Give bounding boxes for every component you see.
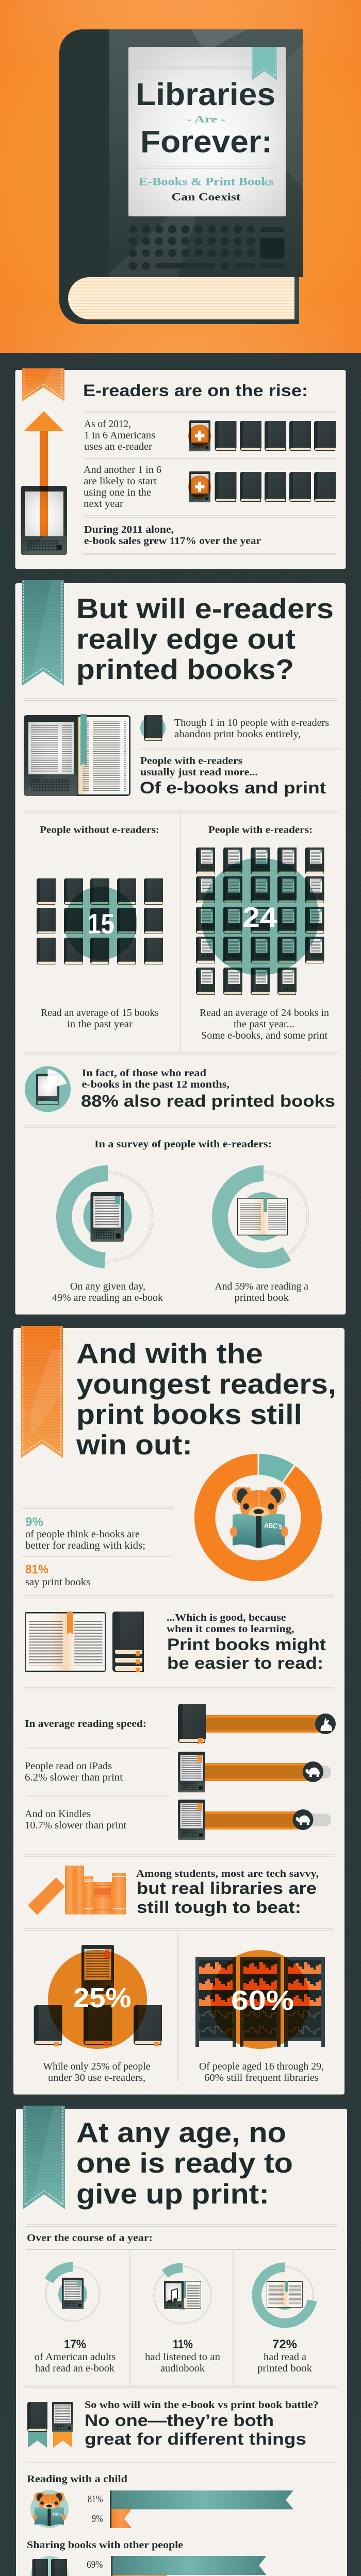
text: another 1 in 6: are likely to start: [84, 476, 157, 487]
stat: 81 percent: say print books: [25, 1577, 90, 1588]
title: Libraries: Libraries: [136, 77, 275, 112]
caption: 24 books: Some e-books, and some print: [201, 1030, 327, 1041]
text: Kindles slower: 10.7% slower than print: [25, 1820, 126, 1831]
subheading: no one: great for different things: [85, 2430, 306, 2448]
text: another 1 in 6: using one in the: [84, 487, 151, 498]
stat: 17 percent: had read an e-book: [35, 2363, 114, 2374]
text: 1 in 6 use e-reader: As of 2012,: [84, 418, 131, 430]
text: another 1 in 6: And another 1 in 6: [84, 464, 161, 476]
pictogram: 24 books: 24: [242, 901, 277, 933]
screen: [128, 47, 286, 216]
text: 1 in 10 abandon print: abandon print books entirely,: [174, 728, 301, 740]
callout: e-book sales growth: During 2011 alone,: [84, 524, 174, 535]
pictogram: 60 percent library shelves: 60%: [231, 1985, 294, 2016]
row: reading with a child: 81%: [88, 2494, 103, 2505]
heading: [76, 592, 334, 685]
text: students tech savvy: Among students, most are tech savvy,: [136, 1868, 319, 1879]
row: sharing books: 69%: [87, 2559, 103, 2570]
label: over a year: Over the course of a year:: [27, 2232, 153, 2244]
stat: 81 percent: 81%: [25, 1563, 48, 1577]
stat: 72 percent: printed book: [257, 2363, 312, 2374]
teal bookmark: [23, 2106, 65, 2209]
subheading: of e-books and print: Of e-books and print: [140, 778, 326, 797]
caption: 25 percent: While only 25% of people: [43, 2061, 151, 2072]
icon: book and e-reader with ribbons: [27, 2402, 73, 2448]
e-reader with rising arrow: [21, 411, 67, 555]
heading: E-readers are on the rise:: [83, 381, 308, 400]
pictogram: 24 books: [196, 848, 324, 995]
stat: 9 percent: of people think e-books are: [25, 1529, 140, 1540]
text: 1 in 6 use e-reader: uses an e-reader: [84, 441, 152, 452]
callout: e-book sales growth: [84, 524, 261, 547]
caption: 24 books: [200, 1007, 329, 1041]
caption: 49 percent: On any given day,: [70, 1281, 145, 1292]
caption: 15 books: [41, 1007, 159, 1030]
text: of e-book readers: e-books in the past 12 months,: [81, 1079, 229, 1090]
text: usually just read more: usually just read more...: [140, 767, 258, 778]
heading: one is ready to: [76, 2147, 293, 2179]
panel: youngest readers: [13, 1326, 344, 2095]
subheading: print easier to read: Print books might: [167, 1635, 326, 1654]
pictogram: 25 percent e-reader use: [34, 1945, 162, 2049]
text: Kindles slower: [25, 1808, 126, 1831]
subheading: print easier to read: [167, 1635, 326, 1672]
icon row: one e-reader and five books: [188, 420, 336, 451]
caption: 59 percent: And 59% are reading a: [215, 1281, 308, 1292]
row: reading with a child: Reading with a child: [27, 2473, 127, 2485]
caption: 49 percent: [52, 1281, 163, 1303]
orange bookmark: [21, 1326, 63, 1458]
heading: print books still: [76, 1398, 302, 1430]
survey heading: In a survey of people with e-readers:: [94, 1139, 272, 1150]
donut: 72 percent print: [252, 2263, 317, 2328]
pictogram: 15 books: 15: [87, 908, 114, 940]
text: 1 in 6 use e-reader: 1 in 6 Americans: [84, 430, 155, 441]
heading: win out:: [76, 1429, 192, 1461]
text: Kindles slower: And on Kindles: [25, 1808, 91, 1820]
caption: 60 percent: Of people aged 16 through 29,: [199, 2061, 324, 2072]
label: average reading speed: In average reading speed:: [25, 1718, 146, 1730]
subtitle: can coexist: Can Coexist: [172, 191, 241, 203]
caption: 15 books: Read an average of 15 books: [41, 1007, 159, 1019]
caption: 24 books: Read an average of 24 books in: [200, 1007, 329, 1019]
speed bar: iPad with turtle: [178, 1752, 331, 1792]
text: iPads slower: People read on iPads: [25, 1760, 112, 1772]
text: 1 in 10 abandon print: [174, 717, 329, 740]
caption: 25 percent: under 30 use e-readers,: [48, 2072, 145, 2083]
pictogram: 60 percent library shelves: [195, 1950, 325, 2049]
icon: book on teal circle: [140, 715, 166, 741]
heading: printed books?: [76, 653, 294, 685]
subtitle: e-books and print books: E-Books & Print Books: [139, 175, 274, 188]
subheading: real libraries: still tough to beat:: [137, 1898, 301, 1917]
pie icon: 88 percent: [25, 1066, 71, 1112]
icon: orange book pile: [28, 1866, 126, 1915]
title: Are: - Are -: [187, 114, 226, 125]
icon: teddy bear reading: ABC's: [264, 1521, 283, 1530]
illustration: e-reader shaped as a book: [59, 29, 303, 324]
stat: 11 percent: [145, 2337, 220, 2374]
text: 1 in 6 use e-reader: [84, 418, 155, 452]
bars: 81 and 9 percent: [110, 2490, 293, 2528]
text: iPads slower: 6.2% slower than print: [25, 1772, 123, 1783]
icon: teddy bear reading: [230, 1485, 288, 1548]
subheading: real libraries: [137, 1879, 317, 1917]
icon: open book: [25, 1612, 106, 1672]
text: good for learning: [167, 1612, 294, 1635]
stat: 17 percent: of American adults: [34, 2351, 116, 2363]
column heading: without e-readers: People without e-readers:: [40, 824, 159, 836]
icon: two stacked books: [30, 2556, 69, 2576]
donut: book preference with kids: [194, 1454, 322, 1581]
stat: 72 percent: had read a: [264, 2351, 306, 2363]
icon: bear: [30, 2490, 69, 2528]
speed bar: Kindle with turtle: [178, 1800, 331, 1840]
stat: 17 percent: [34, 2337, 116, 2374]
text: good for learning: ...Which is good, because: [167, 1612, 286, 1623]
orange bookmark: [22, 368, 64, 401]
subheading: no one: No one—they’re both: [85, 2411, 274, 2430]
row: reading with a child: 9%: [92, 2513, 103, 2524]
caption: 24 books: the past year...: [234, 1019, 294, 1030]
stat: 11 percent: audiobook: [160, 2363, 205, 2374]
donut: 11 percent audiobook: [154, 2263, 211, 2324]
heading: [76, 1337, 336, 1461]
panel: e-readers are on the rise: [15, 368, 346, 569]
caption: 59 percent: [215, 1281, 308, 1303]
callout: e-book sales growth: e-book sales grew 117% over the year: [84, 535, 261, 547]
row: sharing books: Sharing books with other people: [27, 2539, 183, 2551]
heading: But will e-readers: [76, 592, 334, 624]
text: of e-book readers: In fact, of those who read: [81, 1067, 206, 1079]
stat: 17 percent: 17%: [64, 2337, 86, 2351]
heading: really edge out: [76, 623, 296, 655]
pictogram: 15 books: [37, 878, 163, 964]
speed bar: print book with rabbit: [178, 1704, 336, 1744]
teal bookmark: [252, 47, 277, 80]
panel: will e-readers edge out printed books: [15, 580, 346, 1315]
heading: At any age, no: [76, 2116, 286, 2148]
subheading: print easier to read: be easier to read:: [167, 1654, 323, 1672]
column heading: with e-readers: People with e-readers:: [208, 824, 313, 836]
text: usually just read more: [140, 755, 258, 778]
stat: 9 percent: 9%: [25, 1515, 43, 1529]
heading: And with the: [76, 1337, 263, 1369]
caption: 59 percent: printed book: [234, 1292, 289, 1303]
stat: 11 percent: 11%: [173, 2337, 193, 2351]
icon: stack of pages book: [112, 1612, 144, 1672]
pictogram: 25 percent e-reader use: 25%: [73, 1982, 131, 2013]
text: good for learning: when it comes to learning,: [167, 1623, 294, 1635]
caption: 25 percent: [43, 2061, 151, 2083]
teal bookmark: [22, 580, 64, 686]
stat: 72 percent: [257, 2337, 312, 2374]
subheading: no one: [85, 2411, 306, 2448]
stat: 9 percent: better for reading with kids;: [25, 1540, 145, 1551]
panel: no one gives up print: [16, 2106, 347, 2576]
stat: 81 percent: [25, 1563, 90, 1588]
stat: 72 percent: 72%: [272, 2337, 297, 2351]
e-reader and print book side by side: [24, 714, 130, 796]
text: another 1 in 6: [84, 464, 161, 510]
subheading: real libraries: but real libraries are: [137, 1879, 317, 1897]
heading: [76, 2116, 293, 2210]
text: iPads slower: [25, 1760, 123, 1783]
text: of e-book readers: [81, 1067, 229, 1090]
donut: 59 percent reading print: [212, 1165, 309, 1268]
caption: 15 books: in the past year: [67, 1019, 133, 1030]
text: usually just read more: People with e-readers: [140, 755, 242, 767]
donut: 17 percent e-book: [45, 2262, 100, 2321]
subheading: 88 percent: 88% also read printed books: [81, 1092, 335, 1110]
icon: bear: ABC's: [52, 2512, 63, 2517]
text: another 1 in 6: next year: [84, 498, 123, 510]
row: sharing books: [27, 2539, 266, 2576]
row: reading with a child: [27, 2473, 293, 2528]
caption: 49 percent: 49% are reading an e-book: [52, 1292, 163, 1303]
title: Forever: Forever:: [140, 125, 272, 159]
heading: youngest readers,: [76, 1368, 336, 1400]
bars: 69 and 25 percent: [111, 2556, 266, 2576]
stat: 11 percent: had listened to an: [145, 2351, 220, 2363]
header: orange cover area with book: [0, 0, 361, 353]
stat: 9 percent: [25, 1515, 145, 1551]
text: who will win: So who will win the e-book vs print book battle?: [85, 2399, 319, 2411]
text: 1 in 10 abandon print: Though 1 in 10 people with e-readers: [174, 717, 329, 728]
keyboard: [126, 224, 285, 270]
book pages: [68, 277, 294, 319]
icon row: second e-reader and five books: [188, 471, 336, 502]
heading: give up print:: [76, 2178, 269, 2210]
donut: 49 percent reading e-book: [56, 1165, 153, 1268]
caption: 60 percent: 60% still frequent libraries: [204, 2072, 319, 2083]
caption: 60 percent: [199, 2061, 324, 2083]
